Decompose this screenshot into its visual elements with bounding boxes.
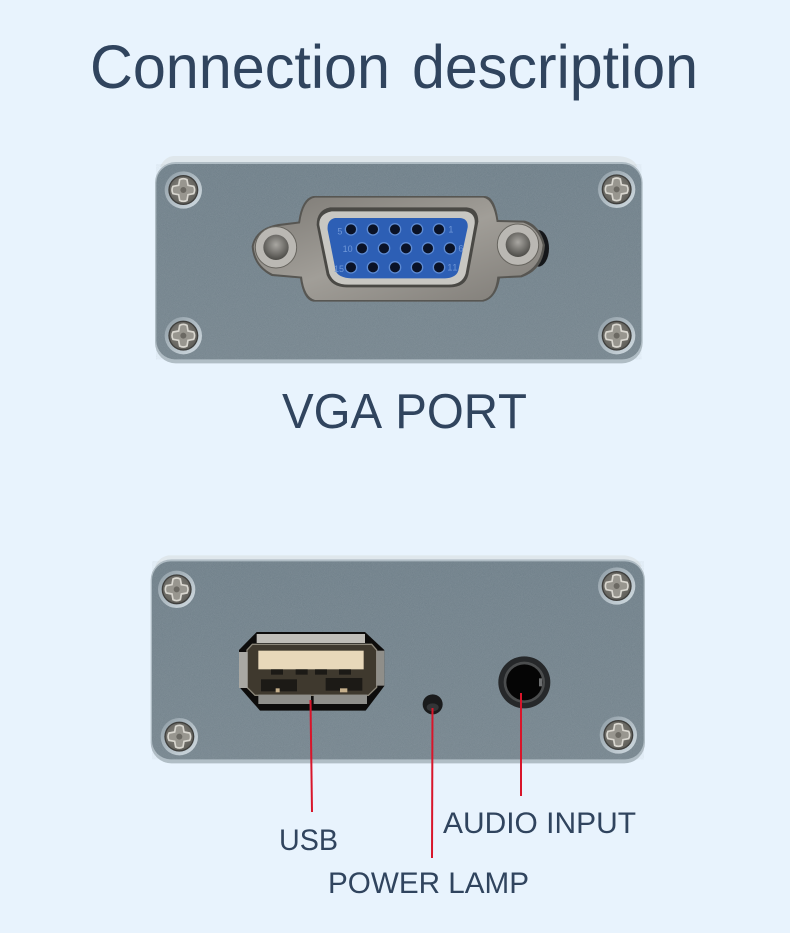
VGA blue insert with 15 pin holes: [328, 218, 468, 278]
title: [90, 33, 698, 101]
VGA blue insert with 15 pin holes: 10: [343, 244, 353, 254]
rear panel screws: [158, 567, 637, 755]
panel: USB, power lamp and audio: [151, 555, 645, 763]
red line: USB: [310, 700, 312, 812]
VGA blue insert with 15 pin holes: 15: [334, 264, 344, 274]
VGA blue insert with 15 pin holes: 1: [448, 225, 453, 235]
rear panel body: [151, 555, 645, 763]
red line: audio input: [520, 693, 522, 796]
power lamp: [423, 694, 443, 714]
USB port: [239, 632, 384, 711]
red line: power lamp: [431, 708, 434, 858]
power lamp label: POWER LAMP: [328, 867, 529, 900]
panel: VGA port: [155, 156, 643, 363]
VGA blue insert with 15 pin holes: 11: [447, 263, 457, 273]
audio jack: [498, 656, 550, 708]
VGA blue insert with 15 pin holes: 5: [337, 227, 342, 237]
VGA connector shell: [252, 196, 549, 302]
VGA panel body: [155, 156, 643, 363]
VGA port label: VGA PORT: [282, 385, 527, 439]
VGA panel screws: [165, 171, 635, 354]
title: Connection: [90, 33, 390, 101]
title: description: [412, 33, 698, 101]
USB label: USB: [279, 824, 338, 857]
audio input label: AUDIO INPUT: [443, 807, 636, 840]
VGA blue insert with 15 pin holes: 6: [458, 243, 463, 253]
